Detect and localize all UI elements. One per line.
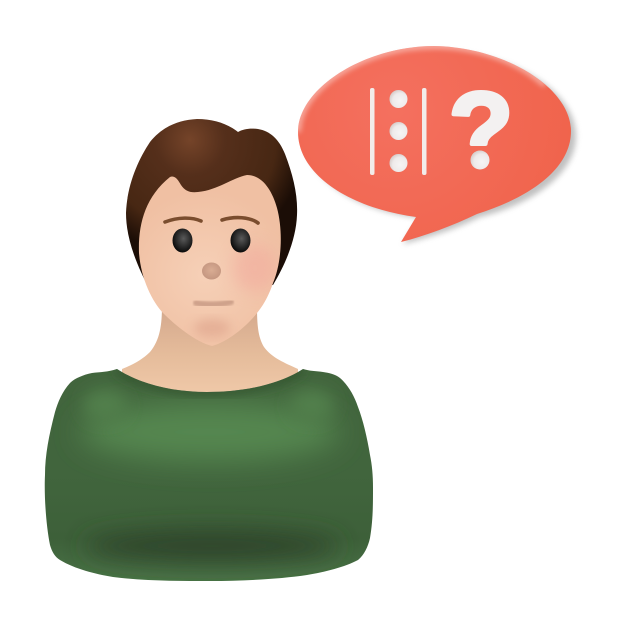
right bar bbox=[422, 88, 426, 175]
middle dot bbox=[390, 122, 408, 140]
top dot bbox=[390, 90, 408, 108]
bubble shadow bbox=[304, 51, 576, 244]
question mark: ? bbox=[449, 71, 513, 189]
right shoulder highlight bbox=[293, 386, 334, 415]
left shoulder highlight bbox=[82, 386, 124, 416]
nose bbox=[202, 262, 221, 280]
mouth bbox=[196, 302, 231, 304]
body: green shirt bbox=[45, 369, 373, 581]
neck bbox=[122, 305, 298, 396]
question mark dot bbox=[470, 150, 490, 170]
chest highlight bbox=[80, 402, 340, 462]
left bar bbox=[370, 88, 374, 175]
chin shadow bbox=[194, 319, 230, 337]
hem shadow bbox=[84, 530, 340, 562]
face bbox=[139, 175, 281, 346]
left eyebrow bbox=[165, 218, 201, 222]
hair bbox=[126, 119, 297, 290]
right eye bbox=[230, 228, 250, 252]
cheek blush bbox=[233, 244, 277, 292]
left eye bbox=[172, 228, 192, 252]
bottom dot bbox=[390, 154, 408, 172]
speech bubble bbox=[298, 46, 576, 244]
collar shadow bbox=[117, 369, 303, 392]
bubble soft top-left edge bbox=[298, 46, 545, 132]
bubble body bbox=[298, 46, 571, 242]
right eyebrow bbox=[222, 218, 258, 223]
illustration: person with speech bubble bbox=[44, 46, 579, 581]
